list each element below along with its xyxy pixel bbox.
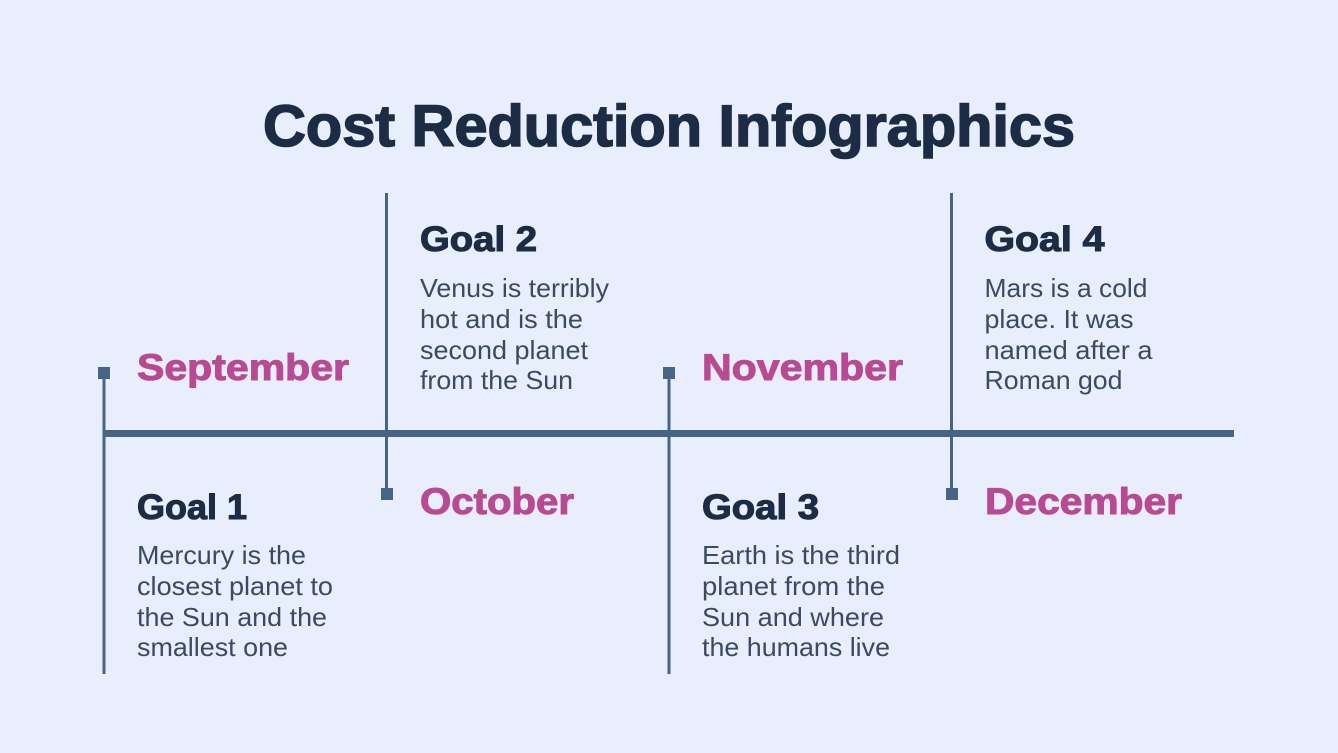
marker: September stem (98, 367, 110, 674)
goal 3 description: planet from the (702, 571, 885, 601)
goal 1 description: the Sun and the (137, 602, 327, 632)
title: Cost Reduction Infographics (263, 94, 1075, 159)
goal 1 heading: Goal 1 (137, 488, 247, 527)
goal 2 heading: Goal 2 (420, 220, 537, 259)
goal 2 description: second planet (420, 335, 589, 365)
goal 4 description: Mars is a cold (984, 273, 1148, 303)
marker: October stem (381, 193, 393, 500)
marker: December stem (946, 193, 958, 500)
goal 4 description: named after a (984, 335, 1153, 365)
goal 1 description: Mercury is the (137, 540, 306, 570)
goal 2 description: Venus is terribly (420, 273, 609, 303)
goal 1 description: smallest one (137, 632, 288, 662)
month: November: November (702, 347, 903, 388)
goal 3 description: Sun and where (702, 602, 884, 632)
goal 1 description: closest planet to (137, 571, 333, 601)
marker: November stem (663, 367, 675, 674)
timeline axis (104, 430, 1234, 437)
goal 4 description: place. It was (984, 304, 1134, 334)
goal 2 description (420, 273, 609, 395)
goal 3 description: Earth is the third (702, 540, 900, 570)
month: December: December (985, 481, 1182, 522)
goal 3 description: the humans live (702, 632, 890, 662)
month: September: September (137, 347, 349, 388)
goal 1 description (137, 540, 333, 662)
goal 4 description (984, 273, 1153, 395)
month: October: October (420, 481, 574, 522)
goal 2 description: from the Sun (420, 365, 573, 395)
goal 3 description (702, 540, 900, 662)
goal 4 heading: Goal 4 (984, 220, 1105, 259)
goal 3 heading: Goal 3 (702, 488, 819, 527)
goal 2 description: hot and is the (420, 304, 583, 334)
goal 4 description: Roman god (984, 365, 1122, 395)
